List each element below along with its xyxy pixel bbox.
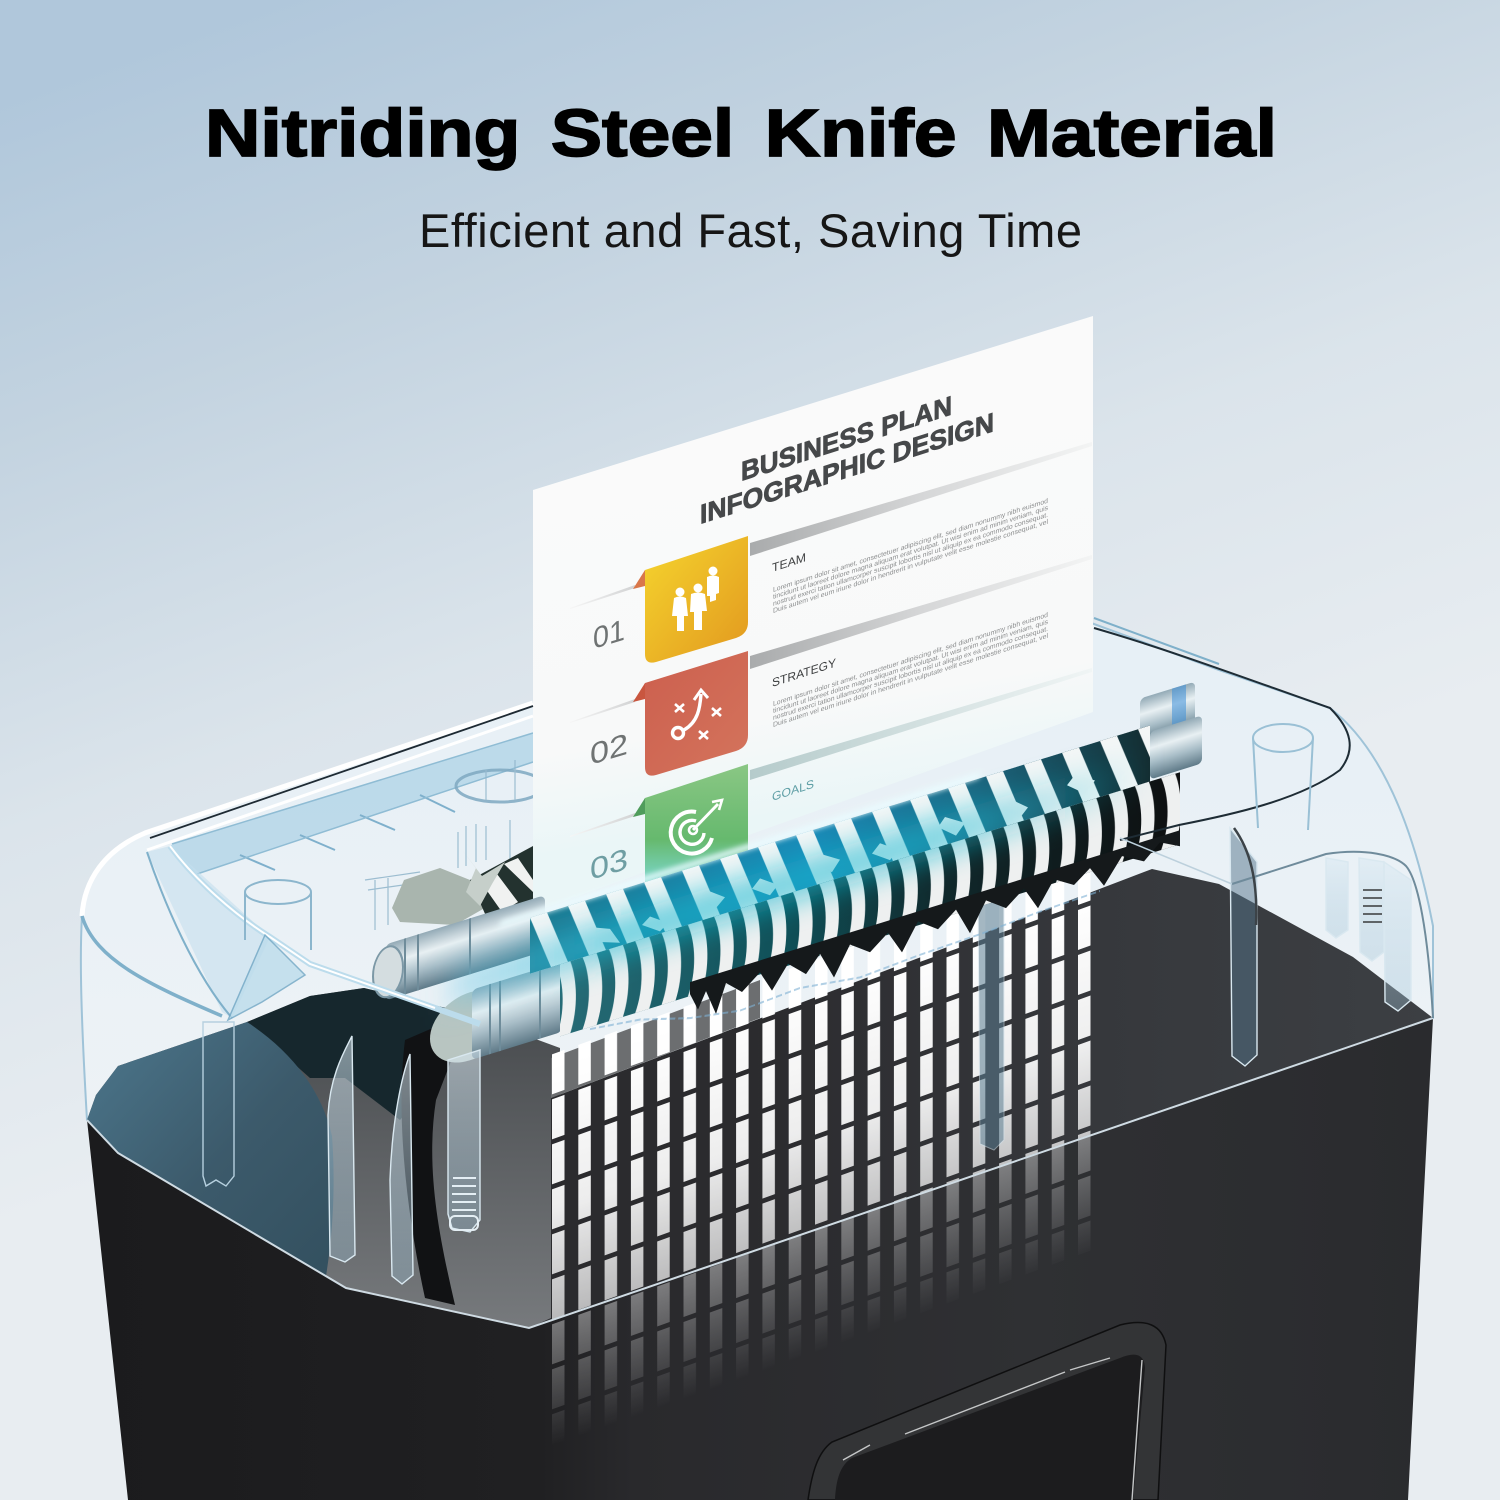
- icon: strategy arrow: [672, 690, 721, 739]
- fold shadow 3: [750, 668, 1092, 780]
- paper heading: BUSINESS PLAN: [741, 390, 952, 487]
- interior back wall: [529, 869, 1433, 1328]
- screw left: [450, 1178, 478, 1230]
- lower shaft: [472, 962, 562, 1060]
- transparent lid glass: [81, 572, 1433, 1328]
- interior base through glass: [87, 988, 560, 1328]
- upper shaft: [385, 895, 545, 1001]
- front window: [808, 1322, 1166, 1500]
- interior teal wall: [87, 1022, 346, 1288]
- lid post cylinder right: [1253, 724, 1313, 830]
- lid corner facet: [228, 935, 305, 1020]
- back tube over strips: [978, 888, 1004, 1150]
- team lorem text: Duis autem vel eum iriure dolor in hendrerit in vulputate velit esse molestie consequat, vel: [773, 519, 1048, 615]
- lower roller right cap: [1150, 715, 1202, 780]
- interior black swoosh: [402, 1012, 470, 1305]
- right back roller caps behind: [1140, 682, 1195, 745]
- strategy lorem text: nostrud exerci tation ullamcorper suscipit lobortis nisl ut aliquip ex ea commodo consequat.: [773, 626, 1048, 722]
- paper sheet: [533, 316, 1093, 912]
- strategy lorem text: Duis autem vel eum iriure dolor in hendrerit in vulputate velit esse molestie consequat, vel: [773, 633, 1048, 729]
- team label: TEAM: [772, 550, 806, 575]
- paper heading: INFOGRAPHIC DESIGN: [700, 407, 994, 530]
- lid corner glass wall: [147, 846, 270, 1018]
- strips reflected on body: [551, 1134, 1092, 1450]
- number 03: 03: [590, 842, 628, 887]
- cyan glow on rollers: [450, 720, 1150, 1008]
- card 02 strategy: [633, 651, 748, 776]
- lower bin body: [87, 1018, 1433, 1500]
- left fold 3: [570, 813, 635, 837]
- lid post cylinder left: [245, 880, 311, 950]
- left fold 2: [570, 699, 635, 723]
- lid rim channel: [172, 733, 533, 875]
- window highlight: [843, 1358, 1142, 1500]
- strategy lorem text: tincidunt ut laoreet dolore magna aliquam erat volutpat. Ut wisi enim ad minim veniam, quis: [773, 619, 1048, 715]
- knife tips: [690, 830, 1180, 1022]
- strategy label: STRATEGY: [772, 656, 836, 690]
- goals label: GOALS: [772, 777, 814, 804]
- interior dark top: [247, 988, 462, 1120]
- team lorem text: nostrud exerci tation ullamcorper suscipit lobortis nisl ut aliquip ex ea commodo consequat.: [773, 512, 1048, 608]
- team lorem text: tincidunt ut laoreet dolore magna aliquam erat volutpat. Ut wisi enim ad minim veniam, quis: [773, 505, 1048, 601]
- upper roller: [530, 726, 1150, 974]
- shredded paper strips: [551, 856, 1092, 1320]
- interior strip backing: [551, 980, 760, 1098]
- left fold 1: [570, 585, 635, 609]
- shred debris mesh: [590, 871, 1100, 1061]
- lower roller: [560, 772, 1180, 1036]
- icon: team people: [672, 566, 719, 631]
- seam line: [87, 1018, 1433, 1328]
- screw right: [1363, 890, 1382, 922]
- cut chips: [590, 769, 1095, 953]
- back mechanism sketch lines: [365, 760, 544, 930]
- curved rib right: [1234, 828, 1256, 925]
- fold shadow 2: [750, 555, 1092, 669]
- number 02: 02: [590, 727, 628, 772]
- team lorem text: Lorem ipsum dolor sit amet, consectetuer adipiscing elit, sed diam nonummy nibh euismod: [773, 498, 1048, 594]
- window frame: [808, 1322, 1166, 1500]
- lid rim lines: [82, 618, 1433, 1024]
- card 03 goals: [633, 764, 748, 890]
- card 01 team: [633, 536, 748, 663]
- upper shaft end: [373, 942, 403, 1001]
- rollers: [373, 691, 1202, 1128]
- number 01: 01: [593, 613, 625, 656]
- strategy lorem text: Lorem ipsum dolor sit amet, consectetuer adipiscing elit, sed diam nonummy nibh euismod: [773, 612, 1048, 708]
- back cam and back roller: [392, 846, 533, 925]
- icon: target: [671, 800, 722, 854]
- transparent posts: [203, 828, 1411, 1284]
- subtitle: Efficient and Fast, Saving Time: [419, 204, 1082, 257]
- title: Nitriding Steel Knife Material: [205, 96, 1277, 171]
- shredder illustration: [81, 316, 1433, 1500]
- window pane: [835, 1355, 1145, 1500]
- lower cam: [430, 980, 510, 1073]
- fold shadow 1: [750, 442, 1092, 556]
